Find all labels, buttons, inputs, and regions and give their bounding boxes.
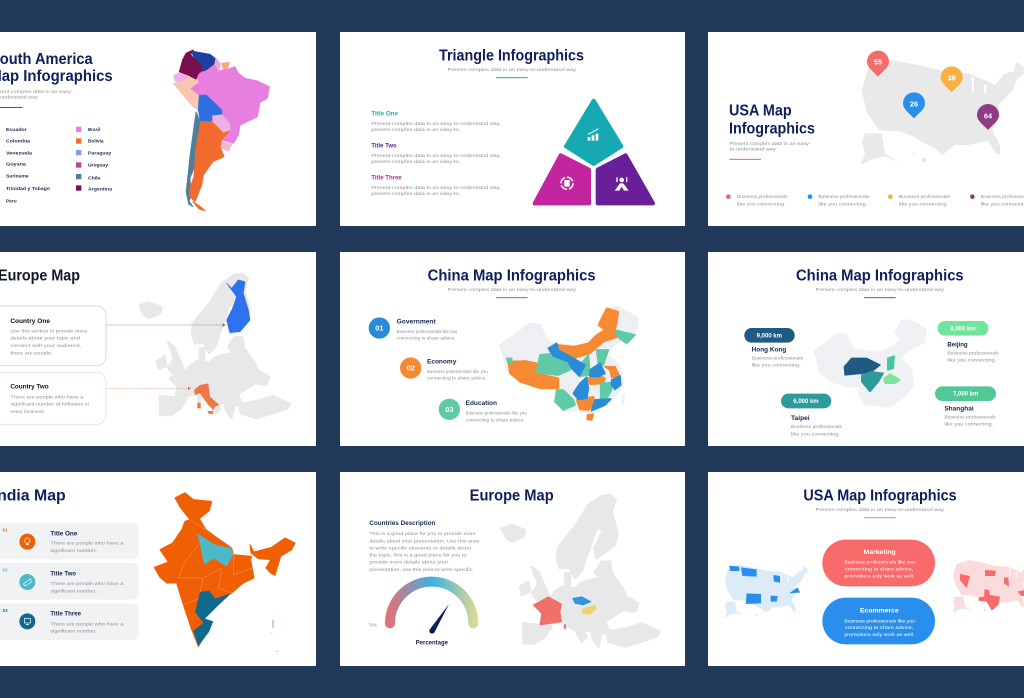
pin: 26 <box>903 92 925 118</box>
text block: title two: Present complex data in an easy-to-understand way, <box>371 153 501 159</box>
text block: title three: present complex data in an easy-to. <box>371 191 460 197</box>
map: China provinces <box>500 307 638 420</box>
label: Taipei: Business professionals <box>791 424 843 430</box>
subtitle <box>729 141 811 153</box>
text block: countries description: Countries Description <box>369 521 436 527</box>
item: 01 Government: Government <box>397 320 436 326</box>
title: China Map Infographics <box>428 268 596 285</box>
row: title two: 02 <box>3 568 8 573</box>
row: title two: significant number. <box>50 588 97 594</box>
panel: Europe Map with gauge <box>340 472 685 666</box>
callout: country one: Country One <box>10 319 51 325</box>
icon: chart <box>588 129 598 141</box>
label: Hong Kong: Hong Kong <box>752 347 787 353</box>
legend item: yellow: Business professionals <box>899 194 950 200</box>
arrow: country one to Finland <box>106 323 226 327</box>
legend item: blue: like you connecting. <box>818 201 867 207</box>
chart: gauge: 70% <box>368 623 377 628</box>
label: Shanghai: like you connecting. <box>944 422 993 428</box>
subtitle <box>0 89 73 101</box>
panel: Triangle Infographics <box>340 32 685 226</box>
subtitle: Present complex data in an easy- <box>729 141 811 147</box>
callout: country one: details about your topic and <box>10 336 80 342</box>
pin: 64: 64 <box>984 111 993 120</box>
legend item: yellow: like you connecting. <box>899 201 948 207</box>
label: Hong Kong: like you connecting. <box>752 362 801 368</box>
title <box>729 103 815 137</box>
icon: cycle document <box>561 177 573 189</box>
card: Marketing: promotions only work as well. <box>844 573 914 579</box>
row: title three: There are people who have a <box>50 621 124 627</box>
pin: 38: 38 <box>948 74 956 83</box>
map highlight: Italy <box>194 383 219 414</box>
label: Hong Kong: 9,000 km <box>757 333 782 339</box>
item: 02 Economy: Business professionals like you <box>427 369 488 375</box>
legend: countries left column: Trinidad y Tobago <box>6 186 50 191</box>
triangle: top segment <box>566 101 621 164</box>
label: Beijing: like you connecting. <box>947 357 996 363</box>
label: Shanghai: Business professionals <box>944 415 996 421</box>
map: USA blue <box>724 565 808 617</box>
map: USA grey <box>860 60 1024 165</box>
row: title one <box>0 523 139 559</box>
card: Marketing: Business professionals like you <box>844 560 915 566</box>
callout: country two: every business. <box>10 409 45 415</box>
row: title three: Title Three <box>50 612 82 618</box>
legend item: purple <box>970 194 1024 207</box>
row: title three <box>0 603 139 640</box>
row: title two <box>0 563 139 600</box>
legend: countries left column: Suriname <box>6 174 29 179</box>
card: Ecommerce: Ecommerce <box>860 608 899 614</box>
label: Shanghai <box>935 386 996 428</box>
title: USA Map Infographics <box>803 488 957 505</box>
legend item: yellow <box>888 194 950 207</box>
map: Europe with highlights <box>502 495 660 647</box>
panel: South America map <box>0 32 316 226</box>
legend item: blue <box>808 194 870 207</box>
map: USA red <box>952 560 1024 612</box>
legend: countries left column: Venezuela <box>6 151 32 156</box>
item: 01 Government: connecting to share advice. <box>397 336 456 342</box>
label: Hong Kong <box>744 328 804 368</box>
map: China highlighted <box>814 320 926 407</box>
text block: countries description: the topic, this is a good place for you to <box>369 553 467 559</box>
legend item: red <box>726 194 788 207</box>
title: Europe Map <box>0 268 80 285</box>
legend item: purple: like you connecting. <box>981 201 1024 207</box>
callout: country two: significant number of followers in <box>10 402 89 408</box>
row: title three: significant number. <box>50 629 97 635</box>
item: 03 Education: Business professionals like you <box>466 411 527 417</box>
text block: countries description: presentation, use this area to write specific. <box>369 567 474 573</box>
label: Beijing: 8,000 km <box>950 326 976 332</box>
item: 02 Economy: 02 <box>407 364 415 373</box>
row: title three: 03 <box>3 608 8 613</box>
item: 02 Economy: connecting to share advice. <box>427 376 487 382</box>
callout: country two: There are people who have a <box>10 394 84 400</box>
label: Beijing: Business professionals <box>947 351 999 357</box>
legend: countries left column: Colombia <box>6 139 30 144</box>
title: Europe Map <box>470 488 554 505</box>
text block: title one <box>371 112 501 133</box>
row: title two: There are people who have a <box>50 581 124 587</box>
title: China Map Infographics <box>796 268 964 285</box>
callout: country one: connect with your audience, <box>10 343 82 349</box>
legend: countries right column <box>76 127 112 191</box>
triangle: right segment <box>598 155 653 203</box>
pin: 38 <box>941 66 963 92</box>
text block: title two <box>371 144 501 165</box>
label: Taipei <box>781 394 843 437</box>
map: India <box>154 493 295 652</box>
row: title one: There are people who have a <box>50 541 124 547</box>
panel: USA Map Infographics comparison <box>708 472 1024 666</box>
text block: title two: present complex data in an easy-to. <box>371 159 460 165</box>
chart: gauge <box>368 582 473 646</box>
triangle: left segment <box>535 155 589 203</box>
icon: people <box>615 177 629 191</box>
legend: countries right column: Chile <box>88 175 101 180</box>
text block: countries description: details about your presentation. Use this area <box>369 538 479 544</box>
text block: title three: Present complex data in an easy-to-understand way, <box>371 185 501 191</box>
card: Marketing <box>822 540 935 586</box>
legend item: red: like you connecting. <box>737 201 786 207</box>
row: title one: 01 <box>3 527 8 532</box>
text block: title two: Title Two <box>371 144 397 150</box>
legend: countries right column: Argentina <box>88 186 112 191</box>
text block: countries description: to write specific elements or details about <box>369 545 472 551</box>
item: 01 Government <box>369 317 458 342</box>
legend: countries right column: Paraguay <box>88 150 112 155</box>
card: Ecommerce <box>822 598 935 644</box>
callout: country two: Country Two <box>10 385 49 391</box>
panel: Europe Map with callouts <box>0 252 316 446</box>
arrow: country two to Italy <box>106 387 191 390</box>
label: Taipei: Taipei <box>791 416 810 422</box>
legend: countries left column: Peru <box>6 199 17 204</box>
chart: gauge: Percentage <box>416 640 449 646</box>
item: 03 Education: 03 <box>445 405 453 414</box>
legend: countries right column: Bolivia <box>88 139 104 144</box>
callout: country two <box>0 372 106 424</box>
text block: countries description <box>369 521 479 573</box>
text block: title one: present complex data in an easy-to. <box>371 127 460 133</box>
pin: 55 <box>867 51 889 77</box>
text block: title one: Present complex data in an easy-to-understand way, <box>371 121 501 127</box>
item: 01 Government: 01 <box>375 324 383 333</box>
callout: country one: Use this section to provide more <box>10 328 88 334</box>
label: Beijing: Beijing <box>947 342 968 348</box>
item: 03 Education <box>439 399 527 423</box>
callout: country one: there are people. <box>10 350 53 356</box>
legend: countries left column: Guyana <box>6 162 26 167</box>
subtitle: Present complex data in an easy-to-understand way <box>816 507 945 513</box>
item: 01 Government: Business professionals like you <box>397 329 458 335</box>
subtitle: Present complex data in an easy-to-understand way <box>448 67 577 73</box>
text block: title three: Title Three <box>371 176 402 182</box>
panel: China Map Infographics numbered <box>340 252 685 446</box>
title: USA Map <box>729 103 792 120</box>
subtitle: Present complex data in an easy-to-understand way <box>816 287 945 293</box>
subtitle: to-understand way <box>729 147 777 153</box>
card: Ecommerce: connecting to share advice, <box>845 625 913 631</box>
card: Ecommerce: promotions only work as well. <box>844 632 914 638</box>
title: Infographics <box>729 120 815 137</box>
card: Ecommerce: Business professionals like you <box>844 618 915 624</box>
panel: India Map <box>0 472 316 666</box>
title: Triangle Infographics <box>439 48 584 65</box>
legend item: blue: Business professionals <box>818 194 870 200</box>
map: Europe grey <box>139 274 290 418</box>
text block: countries description: provide more details about your <box>369 559 449 565</box>
panel: China Map Infographics distances <box>708 252 1024 446</box>
title <box>0 51 113 85</box>
text block: countries description: This is a good place for you to provide more <box>369 531 476 537</box>
subtitle: Present complex data in an easy-to-understand way <box>448 287 577 293</box>
text block: title one: Title One <box>371 112 399 118</box>
label: Shanghai: 7,000 km <box>953 392 978 398</box>
label: Beijing <box>938 321 999 363</box>
row: title two: Title Two <box>50 572 76 578</box>
callout: country one <box>0 306 106 366</box>
card: Marketing: Marketing <box>864 550 896 556</box>
map: South America <box>173 50 269 211</box>
label: Shanghai: Shanghai <box>944 407 974 413</box>
row: title one: Title One <box>50 531 78 537</box>
map highlight: Finland <box>227 280 250 333</box>
legend: countries right column: Uruguay <box>88 163 108 168</box>
item: 02 Economy <box>400 357 488 382</box>
item: 03 Education: connecting to share advice. <box>466 417 525 423</box>
label: Taipei: 6,000 km <box>793 399 819 405</box>
pin: 64 <box>977 104 999 130</box>
legend item: red: Business professionals <box>737 194 788 200</box>
item: 02 Economy: Economy <box>427 360 457 366</box>
label: Taipei: like you connecting. <box>791 431 840 437</box>
legend: countries left column: Ecuador <box>6 127 27 132</box>
row: title one: significant number. <box>50 548 97 554</box>
card: Marketing: connecting to share advice, <box>845 567 913 573</box>
item: 03 Education: Education <box>466 401 497 407</box>
pin: 55: 55 <box>874 58 882 67</box>
text block: title three <box>371 176 501 197</box>
label: Hong Kong: Business professionals <box>752 356 804 362</box>
pin: 26: 26 <box>910 100 918 109</box>
panel: USA Map Infographics <box>708 32 1024 226</box>
legend: countries right column: Brasil <box>88 127 100 132</box>
legend: countries left column <box>6 127 50 204</box>
